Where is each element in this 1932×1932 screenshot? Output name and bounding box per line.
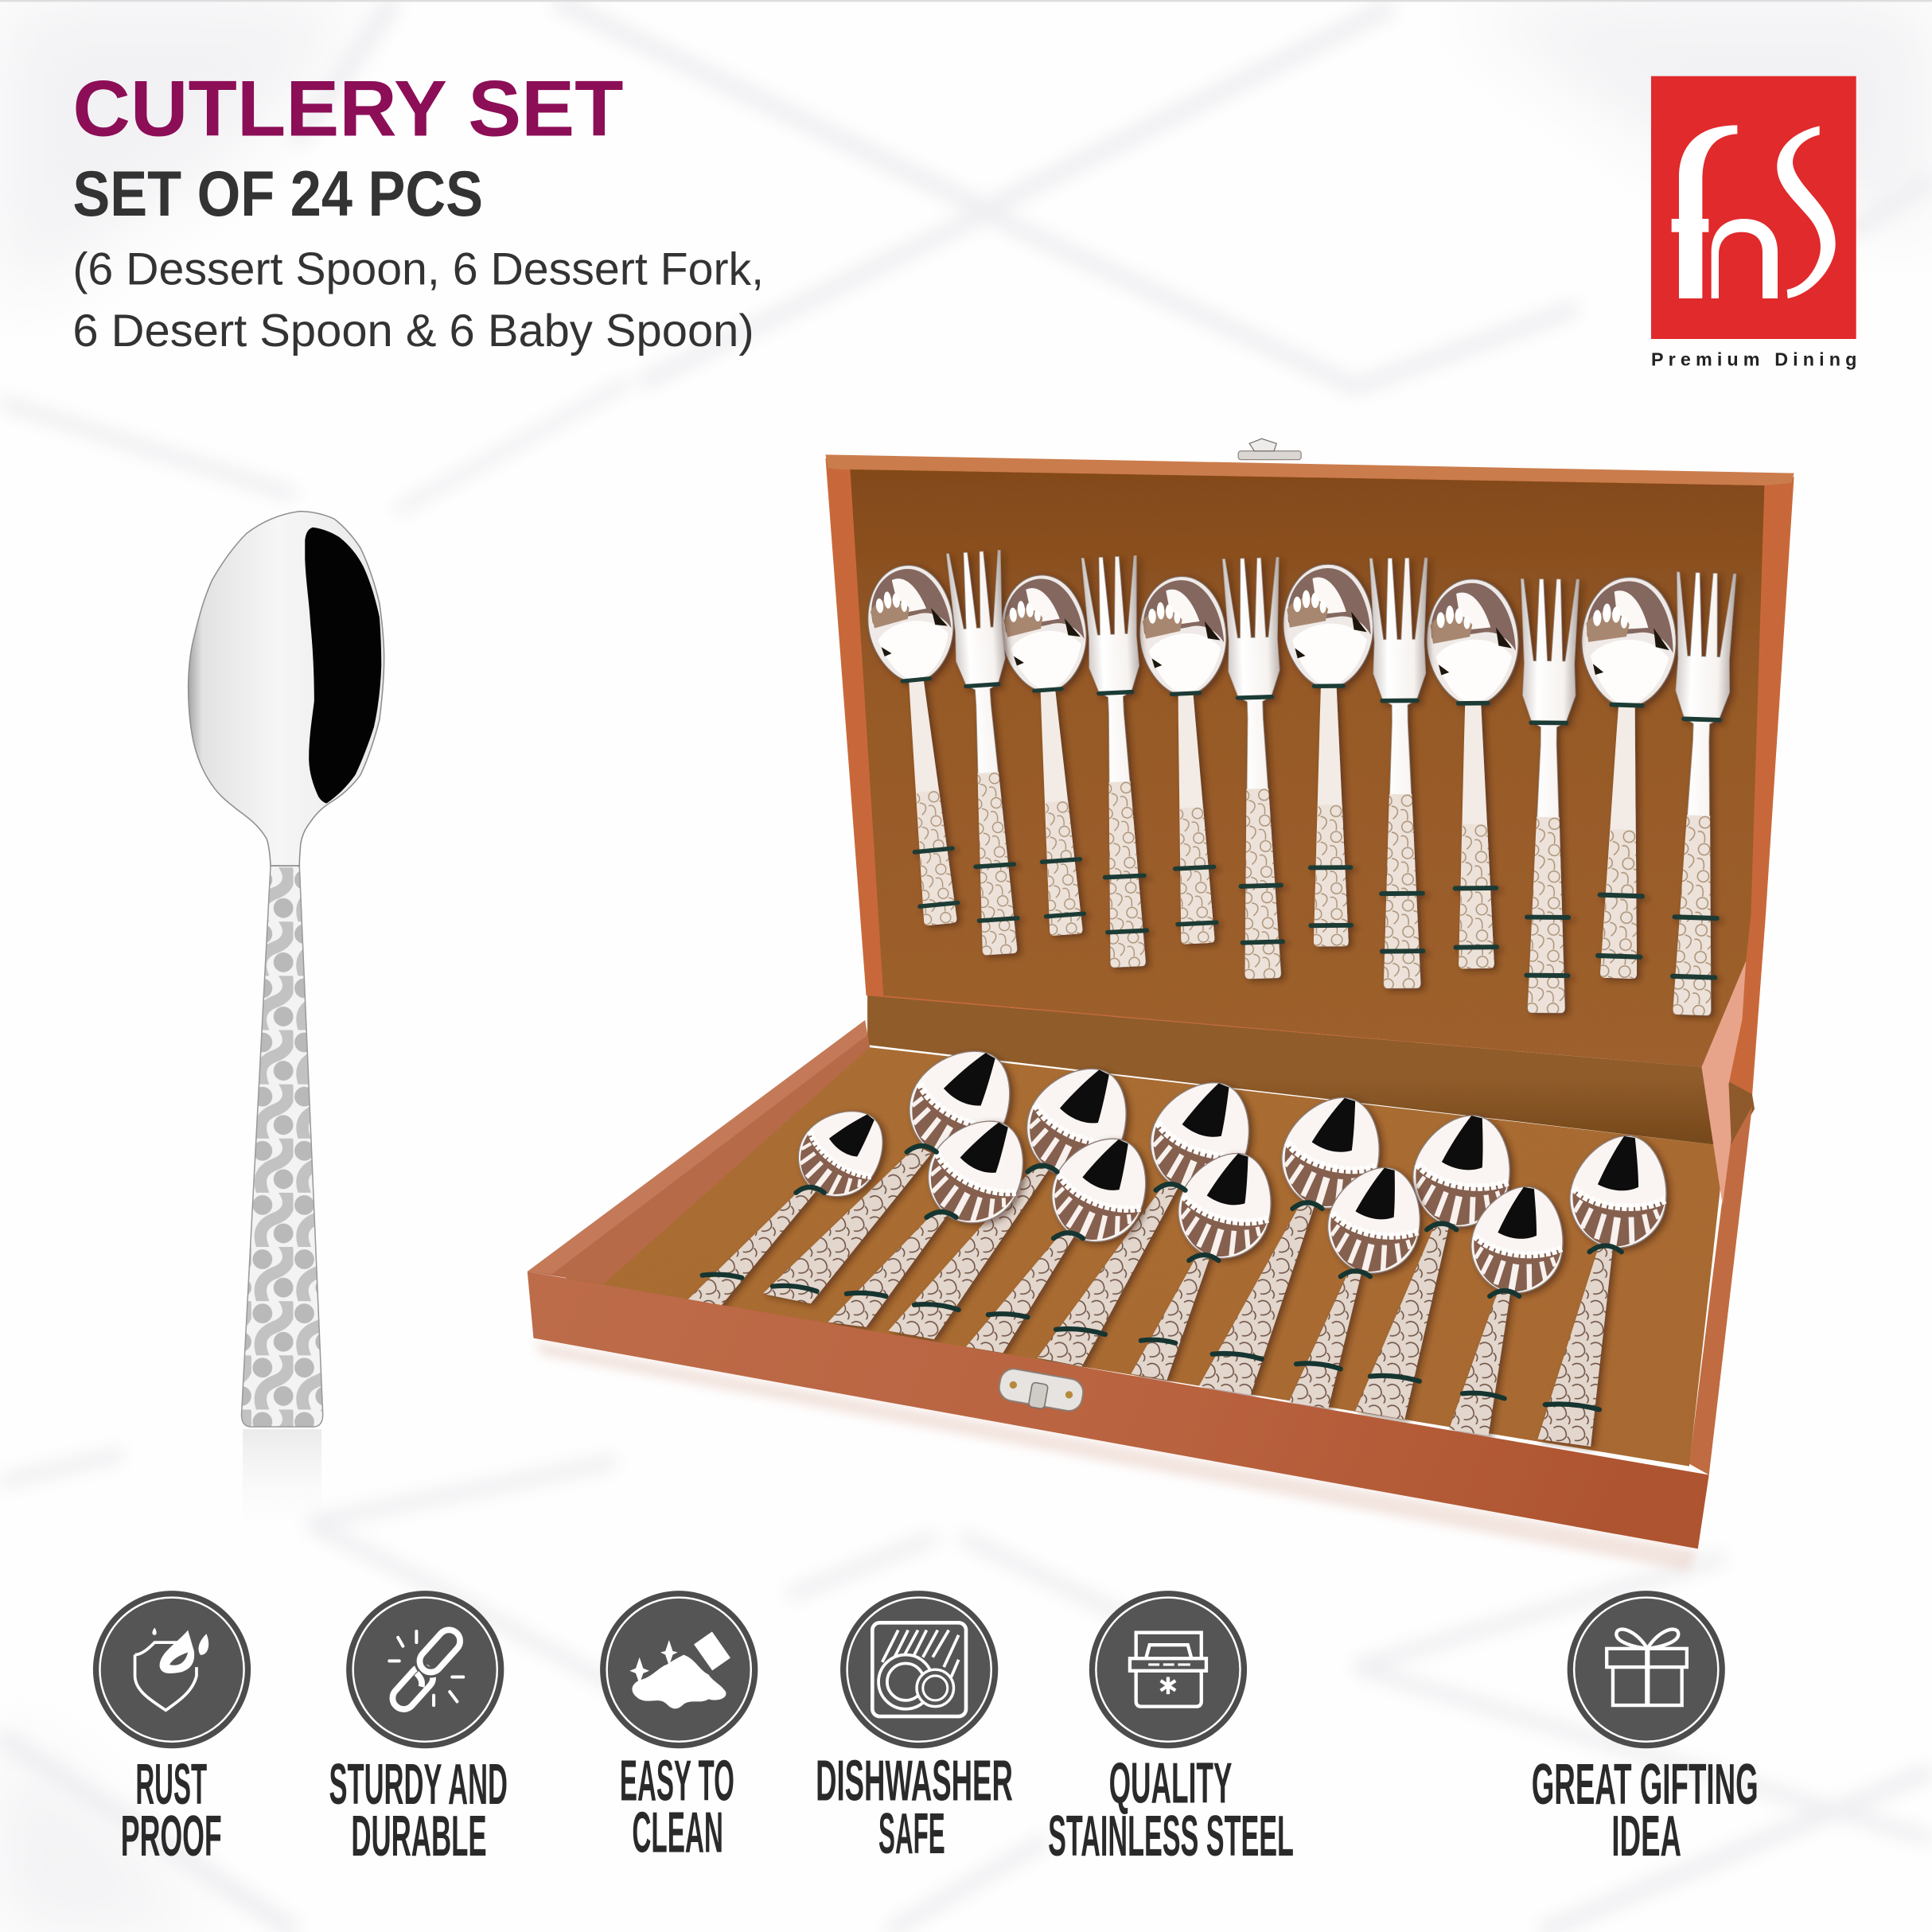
label (121, 1753, 222, 1868)
label: QUALITY (1109, 1751, 1232, 1815)
title: CUTLERY SET (72, 64, 624, 153)
text: STURDY AND (329, 1753, 508, 1817)
lid felt lining (850, 469, 1764, 1067)
lower row: back spoons (763, 1030, 1675, 1447)
single spoon (189, 512, 384, 1427)
feature: rust proof: PROOF (121, 1805, 222, 1868)
cutlery box (528, 438, 1794, 1571)
feature: easy to clean: EASY TO (620, 1749, 734, 1813)
hinge strip (867, 995, 1725, 1146)
lock (997, 1367, 1085, 1416)
left wall (528, 1020, 870, 1284)
box floor felt (562, 1047, 1725, 1467)
shadow under box (533, 1341, 1698, 1571)
description (72, 244, 764, 356)
label (1532, 1753, 1759, 1868)
icon: chain link (346, 1591, 504, 1748)
front wall (528, 1272, 1709, 1548)
text: STAINLESS STEEL (1048, 1805, 1294, 1868)
lid top strip (825, 454, 1794, 485)
feature: great gifting idea (1532, 1591, 1759, 1868)
pink side flap (1701, 961, 1746, 1205)
label (620, 1749, 734, 1864)
label (816, 1749, 1013, 1866)
icon: cooler box (1089, 1591, 1247, 1748)
upper row: spoons (863, 561, 1678, 980)
lower row: elastic bands (703, 1146, 1622, 1409)
logo: FNS Premium Dining (1651, 76, 1856, 369)
icon: gift box (1568, 1591, 1725, 1748)
label (1048, 1751, 1294, 1868)
feature: easy to clean (600, 1591, 758, 1864)
feature: sturdy and durable (329, 1591, 508, 1868)
box lid frame (825, 458, 1794, 1096)
label: SAFE (878, 1802, 945, 1866)
right wall (1689, 1107, 1752, 1475)
gap behind flap (1701, 1067, 1755, 1153)
spoon reflection (243, 1429, 321, 1528)
label: IDEA (1611, 1805, 1681, 1868)
label: CLEAN (632, 1801, 723, 1864)
icon: wiped spill (600, 1591, 758, 1748)
description: 6 Desert Spoon & 6 Baby Spoon) (72, 306, 754, 356)
description: (6 Dessert Spoon, 6 Dessert Fork, (72, 244, 764, 295)
logo: FNS Premium Dining: Premium Dining (1651, 349, 1856, 369)
feature: rust proof (93, 1591, 251, 1868)
icon: shield and drops (93, 1591, 251, 1748)
lower row: front spoons (687, 1091, 1572, 1435)
upper row: forks (946, 550, 1736, 1016)
feature: quality stainless steel (1048, 1591, 1294, 1868)
label: RUST (135, 1753, 207, 1817)
label (329, 1753, 508, 1868)
subtitle: SET OF 24 PCS (72, 158, 483, 230)
label: DISHWASHER (816, 1749, 1013, 1813)
feature: dishwasher safe (816, 1591, 1013, 1866)
label: DURABLE (351, 1805, 487, 1868)
top clasp (1238, 438, 1301, 460)
icon: dishwasher rack (840, 1591, 998, 1748)
